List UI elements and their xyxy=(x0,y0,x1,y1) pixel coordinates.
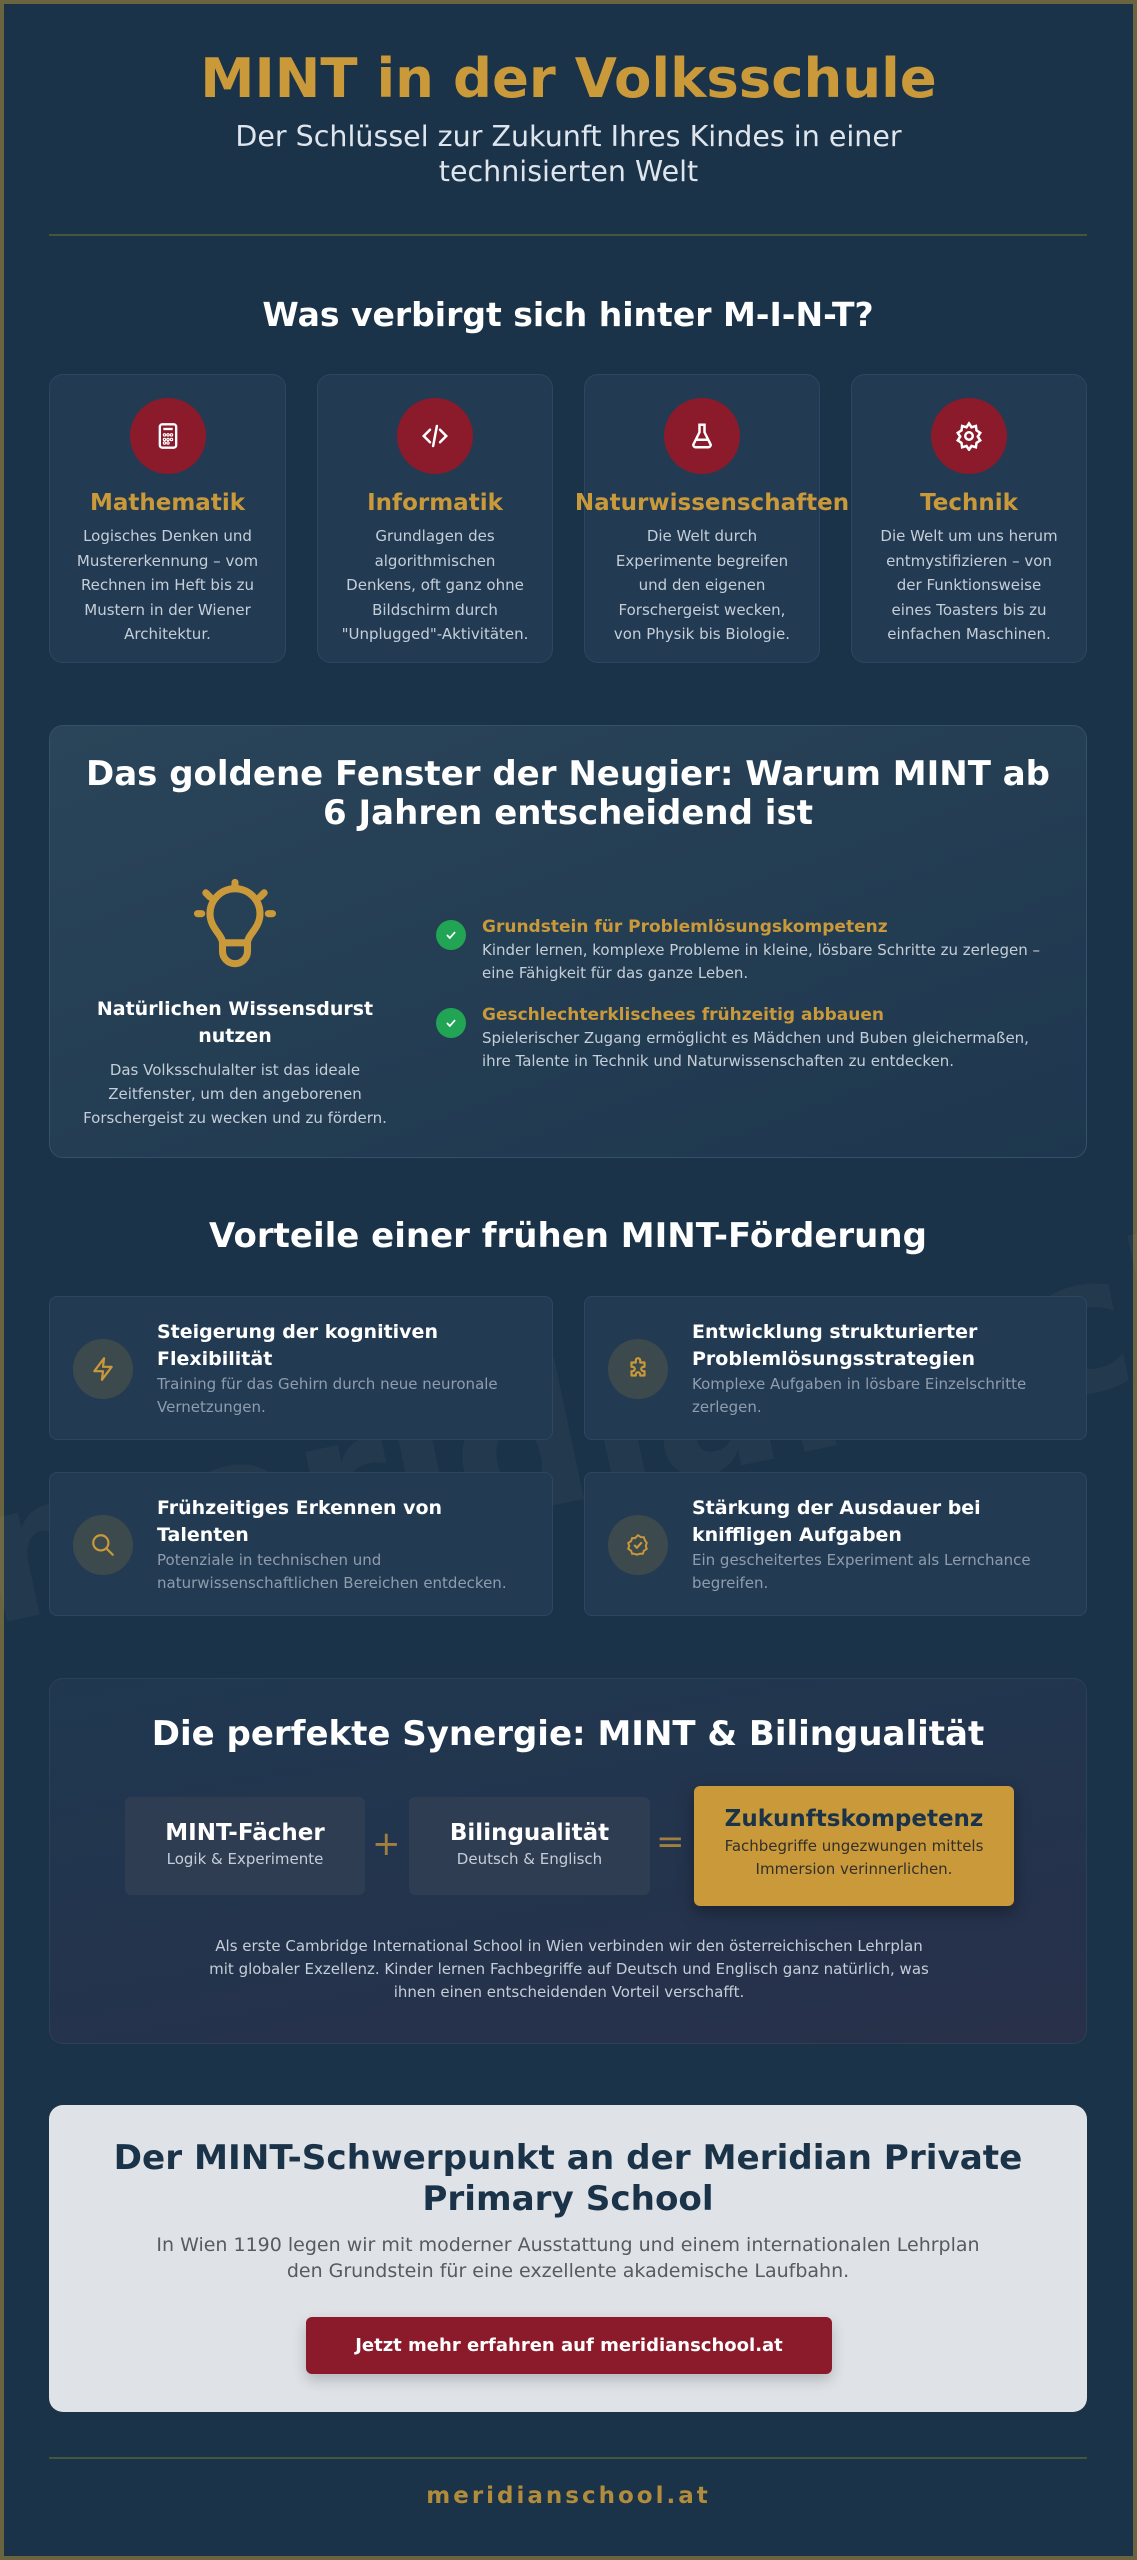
panel: Mathematik: Logisches Denken und Mustererkennung – vom Rechnen im Heft bis zu Mustern in der Wiener Architektur. xyxy=(77,527,258,643)
button: Jetzt mehr erfahren auf meridianschool.at xyxy=(355,2335,783,2356)
card: Problemlösungsstrategien xyxy=(584,1296,1087,1440)
point: Klischees xyxy=(436,1005,1029,1070)
icon: check xyxy=(436,1008,466,1038)
symbol: equals: = xyxy=(656,1822,684,1862)
panel: Naturwissenschaften: Die Welt durch Experimente begreifen und den eigenen Forschergeist wecken, von Physik bis Biologie. xyxy=(614,527,790,643)
card: Talente: Potenziale in technischen und naturwissenschaftlichen Bereichen entdecken. xyxy=(157,1551,507,1592)
box: Zukunftskompetenz: Zukunftskompetenz xyxy=(725,1806,983,1832)
panel: Mathematik: Mathematik xyxy=(90,490,245,516)
card: Ausdauer: Ein gescheitertes Experiment als Lernchance begreifen. xyxy=(692,1551,1031,1592)
icon: lightbulb xyxy=(194,878,276,968)
heading: Der MINT-Schwerpunkt an der Meridian Private Primary School xyxy=(114,2138,1022,2219)
icon: flask xyxy=(664,398,740,474)
heading: Das goldene Fenster der Neugier: Warum MINT ab 6 Jahren entscheidend ist xyxy=(86,754,1050,833)
box: Bilingualität: Deutsch & Englisch xyxy=(457,1850,602,1868)
panel: Technik: Technik xyxy=(920,490,1018,516)
card: Ausdauer: Stärkung der Ausdauer bei kniffligen Aufgaben xyxy=(692,1497,981,1546)
card: Talente: Frühzeitiges Erkennen von Talenten xyxy=(157,1497,442,1546)
title: MINT in der Volksschule xyxy=(200,46,937,110)
card: Problemlösungsstrategien: Komplexe Aufgaben in lösbare Einzelschritte zerlegen. xyxy=(692,1375,1026,1416)
footer: meridianschool.at xyxy=(426,2483,711,2509)
panel: Mathematik xyxy=(49,374,286,663)
panel: Informatik xyxy=(317,374,553,663)
icon: bolt xyxy=(73,1339,133,1399)
text: Cambridge: Als erste Cambridge International School in Wien verbinden wir den österreichischen Lehrplan mit globaler Exzellenz. Kinder lernen Fachbegriffe auf Deutsch und Englisch ganz natürlich, was ihnen einen entscheidenden Vorteil verschafft. xyxy=(209,1937,929,2001)
point: Problemlösung xyxy=(436,917,1040,982)
point: Klischees: Spielerischer Zugang ermöglicht es Mädchen und Buben gleichermaßen, ihre Talente in Technik und Naturwissenschaften zu entdecken. xyxy=(482,1029,1029,1070)
icon: calculator xyxy=(130,398,206,474)
panel: Informatik: Grundlagen des algorithmischen Denkens, oft ganz ohne Bildschirm durch "Unplugged"-Aktivitäten. xyxy=(342,527,528,643)
heading: Die perfekte Synergie: MINT & Bilingualität xyxy=(152,1714,984,1754)
card: Problemlösungsstrategien: Entwicklung strukturierter Problemlösungsstrategien xyxy=(692,1321,977,1370)
icon: badge check xyxy=(608,1515,668,1575)
heading: M-I-N-T: Was verbirgt sich hinter M-I-N-T? xyxy=(262,295,874,334)
icon: search xyxy=(73,1515,133,1575)
panel: Synergie xyxy=(49,1678,1087,2044)
symbol: plus: + xyxy=(372,1824,400,1864)
button xyxy=(306,2317,832,2374)
panel: Meridian CTA xyxy=(49,2105,1087,2412)
icon: code xyxy=(397,398,473,474)
left column: Wissensdurst: Das Volksschulalter ist das ideale Zeitfenster, um den angeborenen Forschergeist zu wecken und zu fördern. xyxy=(83,1061,387,1127)
card: Talente xyxy=(49,1472,553,1616)
left column: Wissensdurst xyxy=(83,878,387,1127)
point: Problemlösung: Kinder lernen, komplexe Probleme in kleine, lösbare Schritte zu zerlegen – eine Fähigkeit für das ganze Leben. xyxy=(482,941,1040,982)
box: MINT-Fächer: Logik & Experimente xyxy=(167,1850,323,1868)
text: In Wien 1190 legen wir mit moderner Ausstattung und einem internationalen Lehrplan den Grundstein für eine exzellente akademische Laufbahn. xyxy=(156,2234,980,2282)
box: Zukunftskompetenz: Fachbegriffe ungezwungen mittels Immersion verinnerlichen. xyxy=(725,1837,983,1878)
card: Flexibilität: Steigerung der kognitiven Flexibilität xyxy=(157,1321,438,1370)
panel: Technik xyxy=(851,374,1087,663)
panel: Naturwissenschaften xyxy=(584,374,820,663)
point: Klischees: Geschlechterklischees frühzeitig abbauen xyxy=(482,1005,884,1025)
box: MINT-Fächer: MINT-Fächer xyxy=(165,1820,325,1846)
box: MINT-Fächer xyxy=(125,1797,365,1895)
icon: check xyxy=(436,920,466,950)
card: Flexibilität: Training für das Gehirn durch neue neuronale Vernetzungen. xyxy=(157,1375,498,1416)
point: Problemlösung: Grundstein für Problemlösungskompetenz xyxy=(482,917,888,937)
card: Ausdauer xyxy=(584,1472,1087,1616)
subtitle: Der Schlüssel zur Zukunft Ihres Kindes in einer technisierten Welt xyxy=(235,120,902,188)
icon: puzzle xyxy=(608,1339,668,1399)
icon: gear xyxy=(931,398,1007,474)
panel: goldenes Fenster xyxy=(49,725,1087,1158)
left column: Wissensdurst: Natürlichen Wissensdurst nutzen xyxy=(97,998,373,1047)
box: Bilingualität: Bilingualität xyxy=(450,1820,609,1846)
panel: Naturwissenschaften: Naturwissenschaften xyxy=(575,490,849,516)
panel: Technik: Die Welt um uns herum entmystifizieren – von der Funktionsweise eines Toasters bis zu einfachen Maschinen. xyxy=(880,527,1058,643)
box: Zukunftskompetenz xyxy=(694,1786,1014,1906)
card: Flexibilität xyxy=(49,1296,553,1440)
heading: Vorteile: Vorteile einer frühen MINT-Förderung xyxy=(209,1216,927,1256)
panel: Informatik: Informatik xyxy=(367,490,503,516)
box: Bilingualität xyxy=(409,1797,650,1895)
